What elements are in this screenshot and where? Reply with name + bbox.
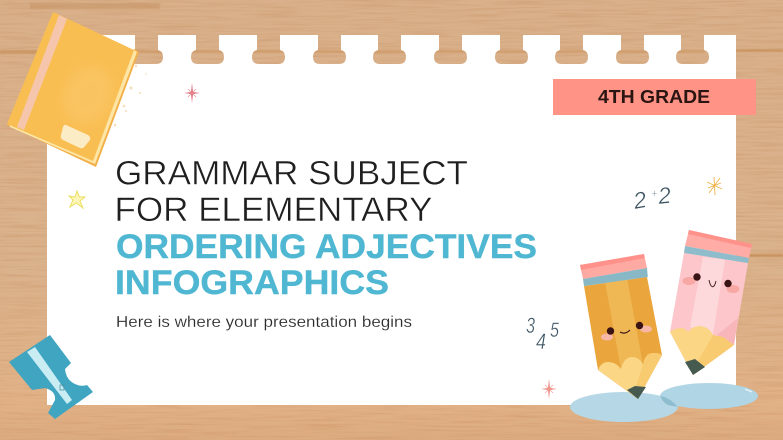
title: GRAMMAR SUBJECT — [115, 154, 468, 192]
grade label: 4TH GRADE — [598, 87, 710, 107]
handwritten numbers: 2+2 — [630, 182, 672, 214]
handwritten numbers: 3 4 5: 3 — [526, 313, 536, 338]
handwritten numbers: 2+2: + — [651, 188, 658, 200]
icon: blue puddle right — [660, 383, 758, 409]
torn notebook paper — [47, 35, 736, 405]
icon: orange sparkle — [707, 177, 722, 195]
icon: yellow star — [69, 191, 85, 208]
title: ORDERING ADJECTIVES — [116, 228, 537, 266]
handwritten numbers: 3 4 5: 5 — [550, 319, 559, 342]
handwritten numbers: 3 4 5: 4 — [536, 329, 546, 354]
icon: orange pencil — [580, 254, 662, 399]
title: FOR ELEMENTARY — [114, 191, 432, 229]
decorative paper specks — [114, 65, 147, 126]
subtitle: Here is where your presentation begins — [116, 314, 412, 331]
handwritten numbers: 2+2: 2 — [656, 182, 672, 209]
icon: blue sharpener — [9, 335, 93, 419]
icon: pink sparkle bottom — [541, 379, 557, 399]
icon: pink pencil — [670, 230, 752, 375]
icon: pink sparkle top — [184, 83, 200, 103]
icon: yellow notebook — [7, 12, 139, 167]
handwritten numbers: 2+2: 2 — [630, 186, 649, 214]
title — [114, 154, 537, 302]
icon: blue puddle left — [570, 392, 678, 422]
handwritten numbers: 3 4 5 — [526, 313, 559, 354]
grade label — [553, 79, 756, 115]
title: INFOGRAPHICS — [115, 264, 389, 302]
